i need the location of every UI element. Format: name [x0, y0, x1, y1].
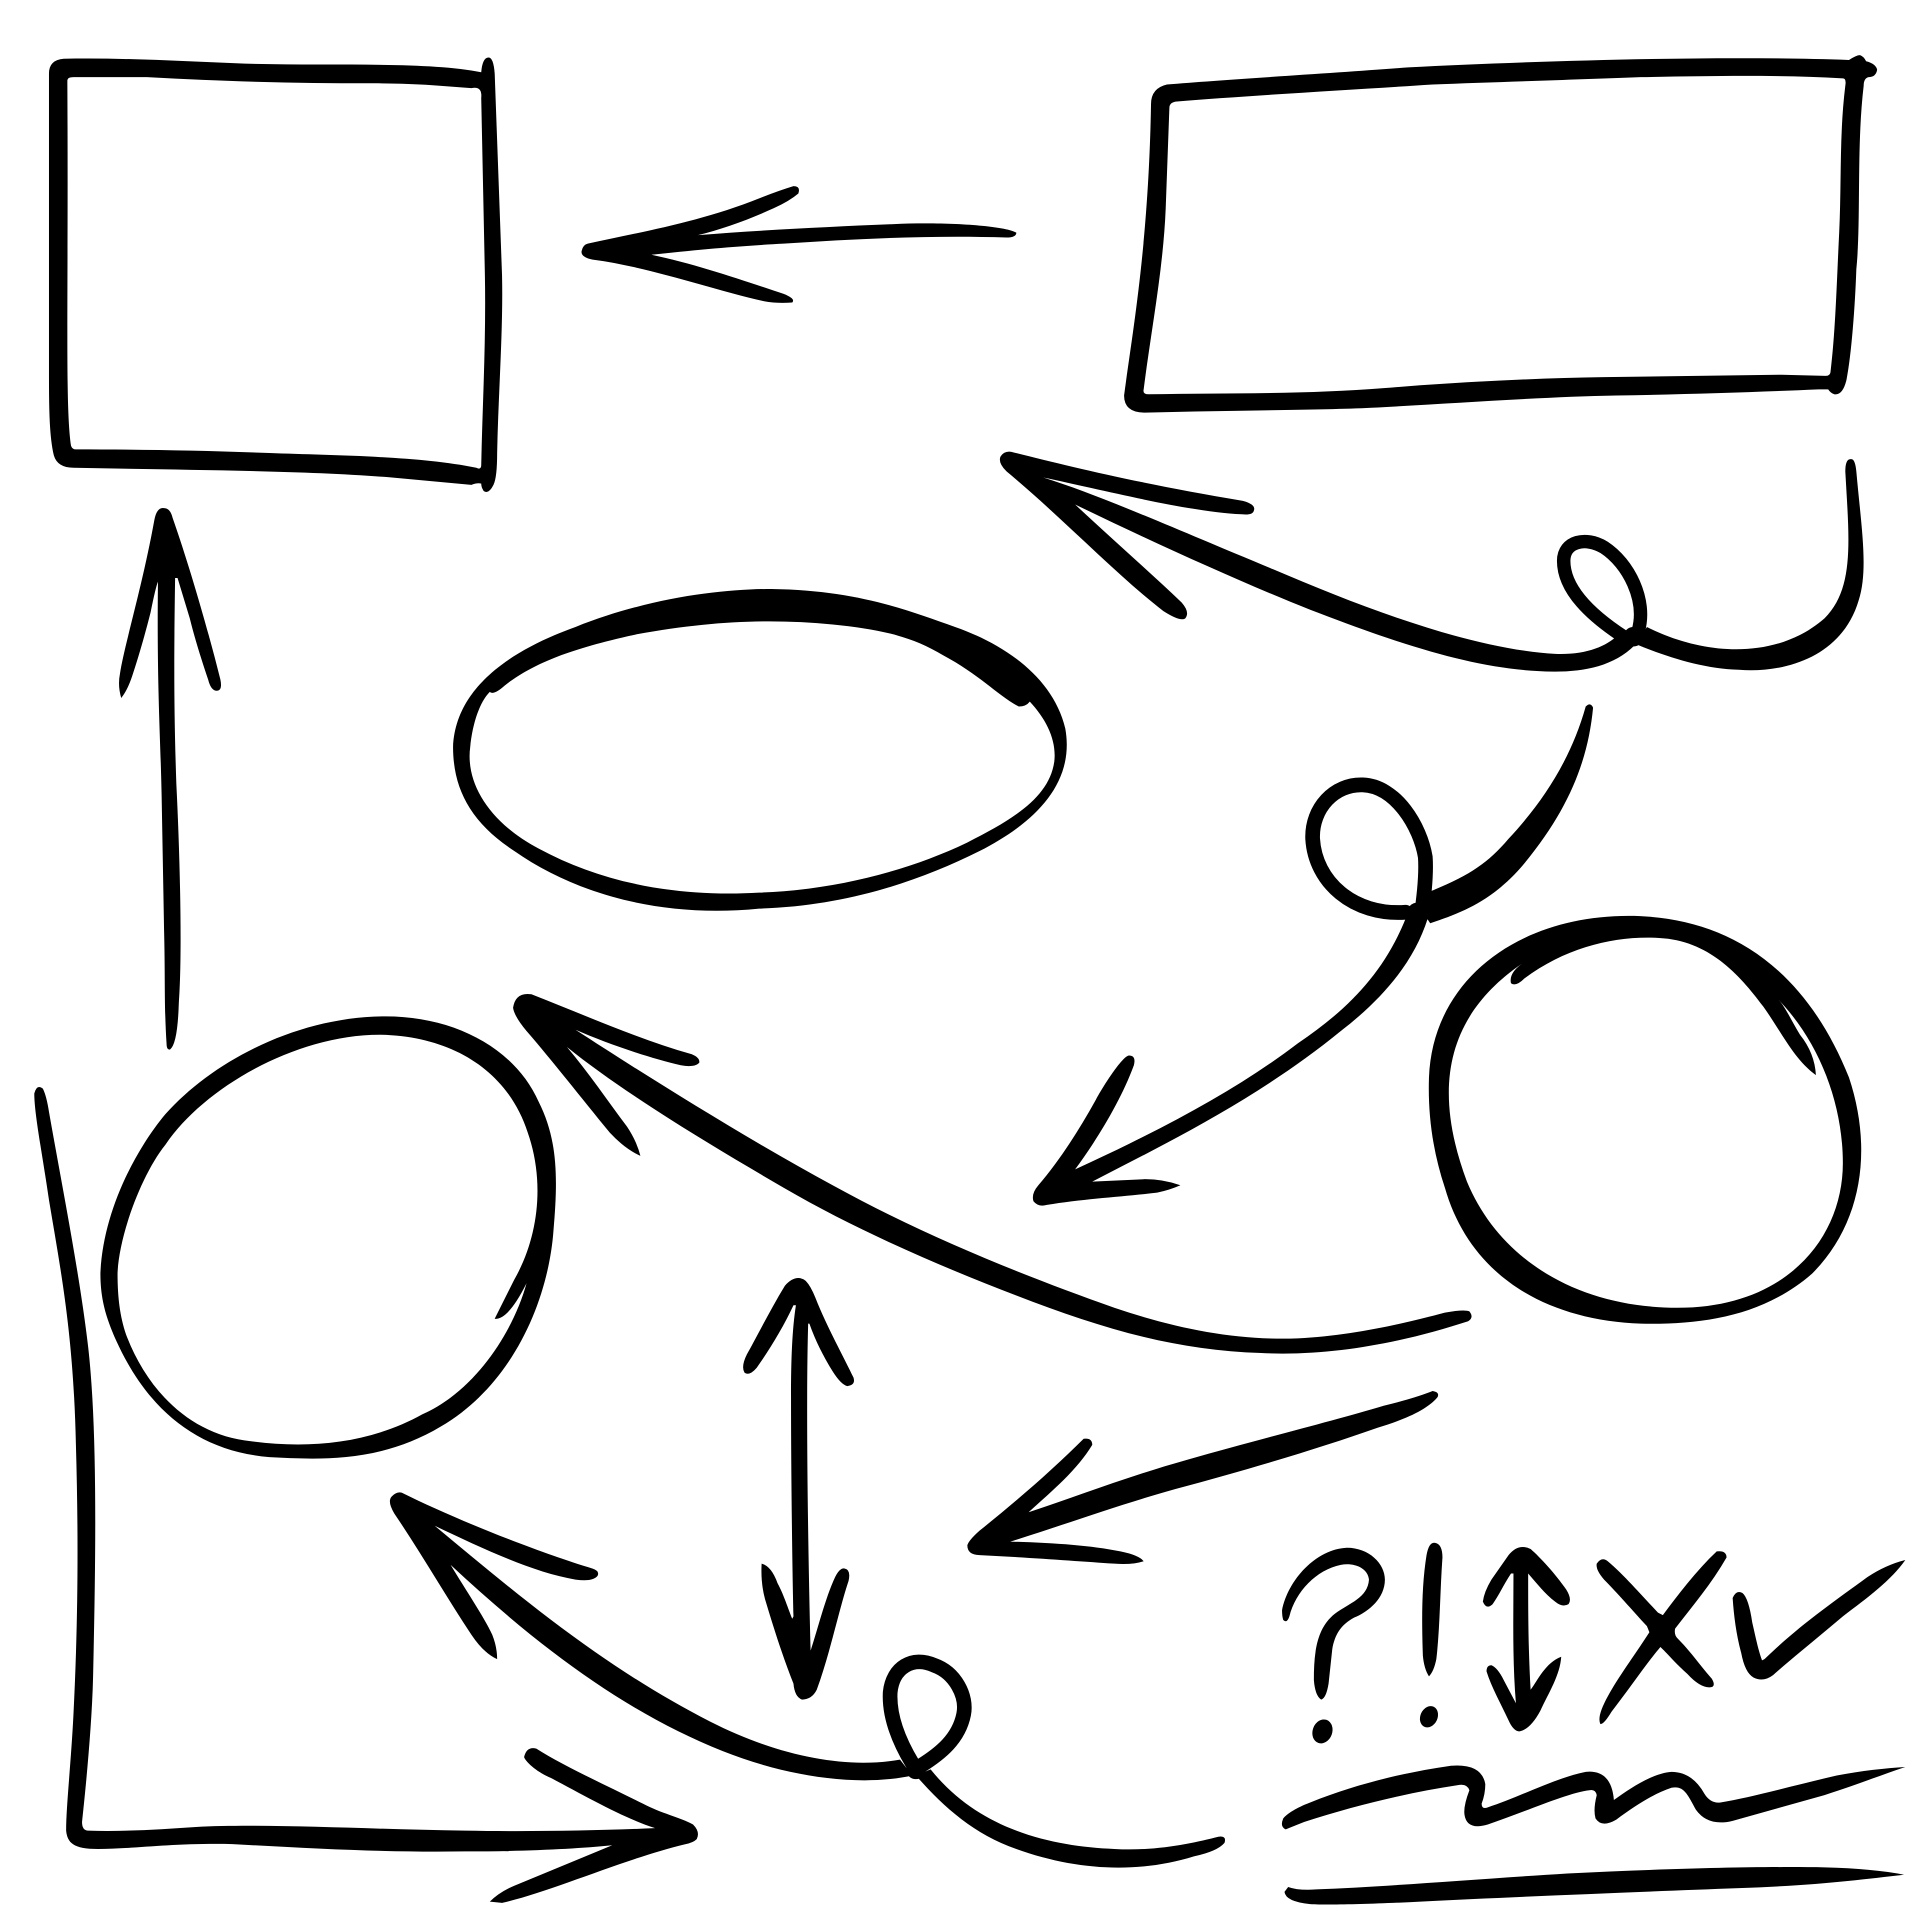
arrow: vertical double-headed — [743, 1278, 854, 1700]
shape: right circle — [1429, 916, 1861, 1324]
arrow: top right with loop — [1000, 452, 1864, 672]
shape: centre oval — [453, 589, 1067, 911]
stroke: straight brush underline — [1284, 1867, 1904, 1905]
arrow: bottom with loop pointing upper left — [390, 1492, 1225, 1868]
panel: hand-drawn wide rectangle — [1124, 55, 1877, 413]
icon: cross mark — [1597, 1551, 1727, 1724]
arrow: pointing left at top — [582, 186, 1016, 303]
arrow: long curved pointing upper left — [513, 994, 1472, 1354]
icon: question mark — [1282, 1548, 1385, 1746]
icon: check mark — [1733, 1560, 1905, 1680]
stroke: zigzag underline — [1282, 1765, 1905, 1829]
arrow: centre right with loop — [1033, 704, 1593, 1206]
arrow: pointing lower left — [967, 1391, 1438, 1564]
arrow: L-shaped bent pointing right — [34, 1087, 698, 1903]
panel: hand-drawn square box — [49, 58, 502, 492]
arrow: pointing up — [119, 508, 221, 1050]
icon: exclamation mark — [1417, 1543, 1442, 1730]
icon: small up-down arrow — [1483, 1547, 1570, 1731]
shape: left circle — [100, 1016, 556, 1459]
